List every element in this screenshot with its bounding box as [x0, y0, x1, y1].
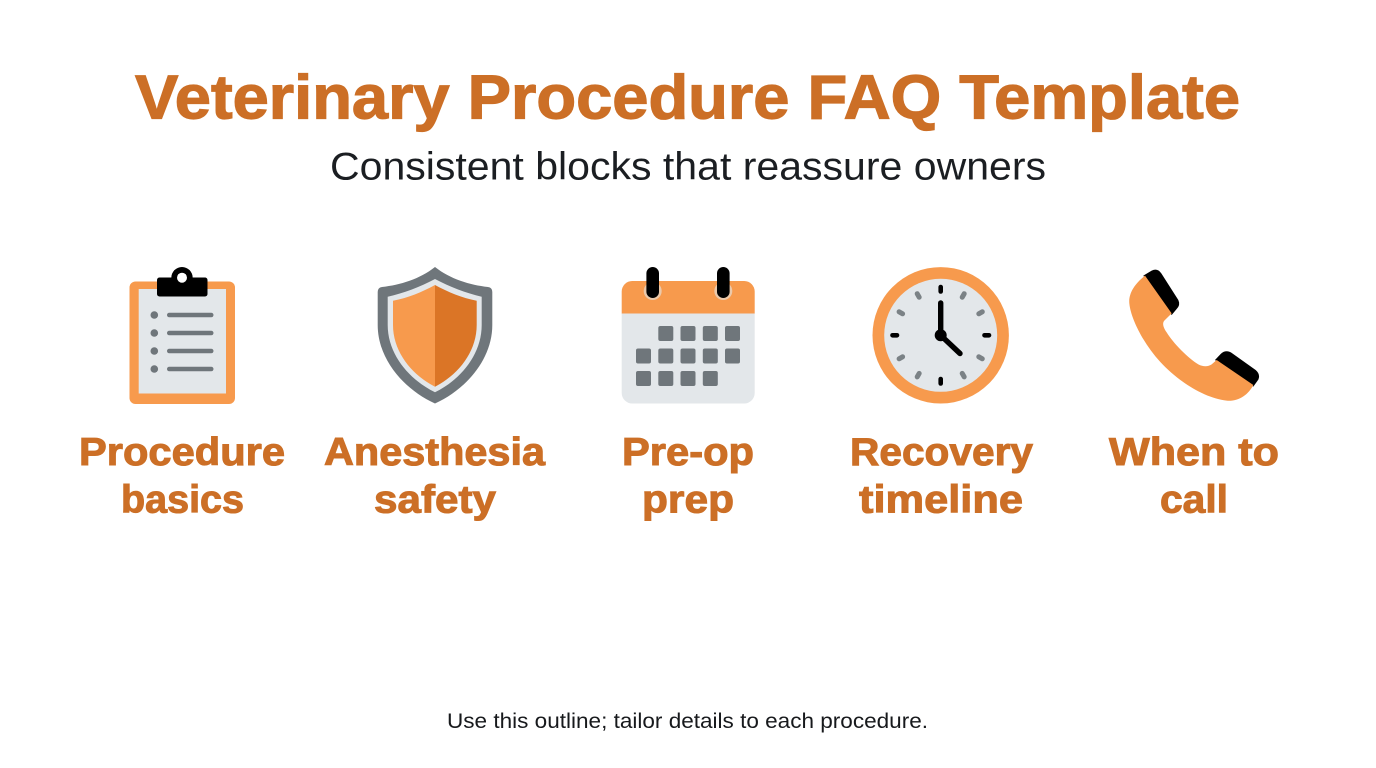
label: Pre-op prep: Pre-op — [622, 431, 754, 474]
icon: shield — [378, 267, 492, 404]
icon: clipboard — [130, 267, 235, 404]
label: Recovery timeline: Recovery — [850, 431, 1033, 474]
icon: phone — [1129, 270, 1259, 401]
label: Pre-op prep: prep — [642, 478, 734, 522]
label: Recovery timeline: timeline — [859, 478, 1023, 522]
label: Anesthesia safety: safety — [374, 478, 496, 522]
label: When to call: call — [1160, 478, 1228, 522]
label: Procedure basics: Procedure — [79, 431, 285, 474]
icon: calendar — [622, 267, 755, 404]
label: Pre-op prep — [622, 431, 754, 522]
label: When to call — [1109, 431, 1279, 522]
footer note: Use this outline; tailor details to each procedure. — [447, 710, 928, 733]
label: Anesthesia safety: Anesthesia — [324, 431, 545, 474]
title: Veterinary Procedure FAQ Template — [135, 64, 1240, 132]
label: Procedure basics — [79, 431, 285, 522]
label: When to call: When to — [1109, 431, 1279, 474]
subtitle: Consistent blocks that reassure owners — [330, 146, 1046, 188]
icon: clock — [872, 267, 1009, 403]
label: Recovery timeline — [850, 431, 1033, 522]
label: Procedure basics: basics — [121, 478, 244, 522]
label: Anesthesia safety — [324, 431, 545, 522]
